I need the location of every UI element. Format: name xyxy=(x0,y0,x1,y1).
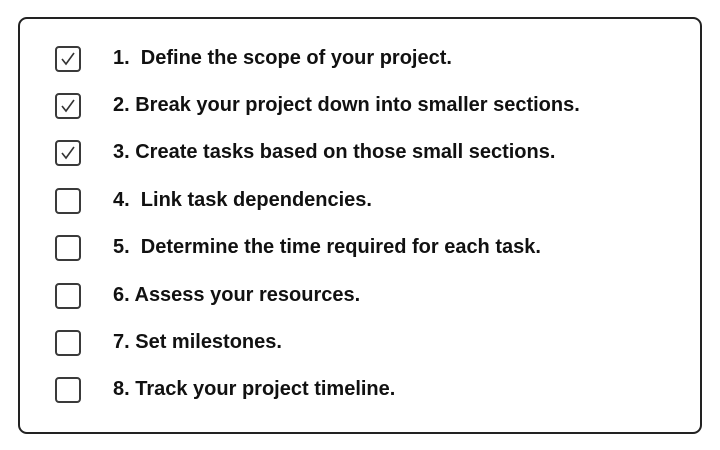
item 1: 1. Define the scope of your project. xyxy=(113,47,452,69)
item 7 xyxy=(55,330,282,356)
item 4: 4. Link task dependencies. xyxy=(113,189,372,211)
item 8: 8. Track your project timeline. xyxy=(113,378,395,400)
item 2: 2. Break your project down into smaller sections. xyxy=(113,94,580,116)
item 3: 3. Create tasks based on those small sections. xyxy=(113,141,555,163)
item 6 xyxy=(55,283,360,309)
item 6: 6. Assess your resources. xyxy=(113,284,360,306)
item 7: 7. Set milestones. xyxy=(113,331,282,353)
item 5: 5. Determine the time required for each task. xyxy=(113,236,541,258)
item 4 xyxy=(55,188,372,214)
